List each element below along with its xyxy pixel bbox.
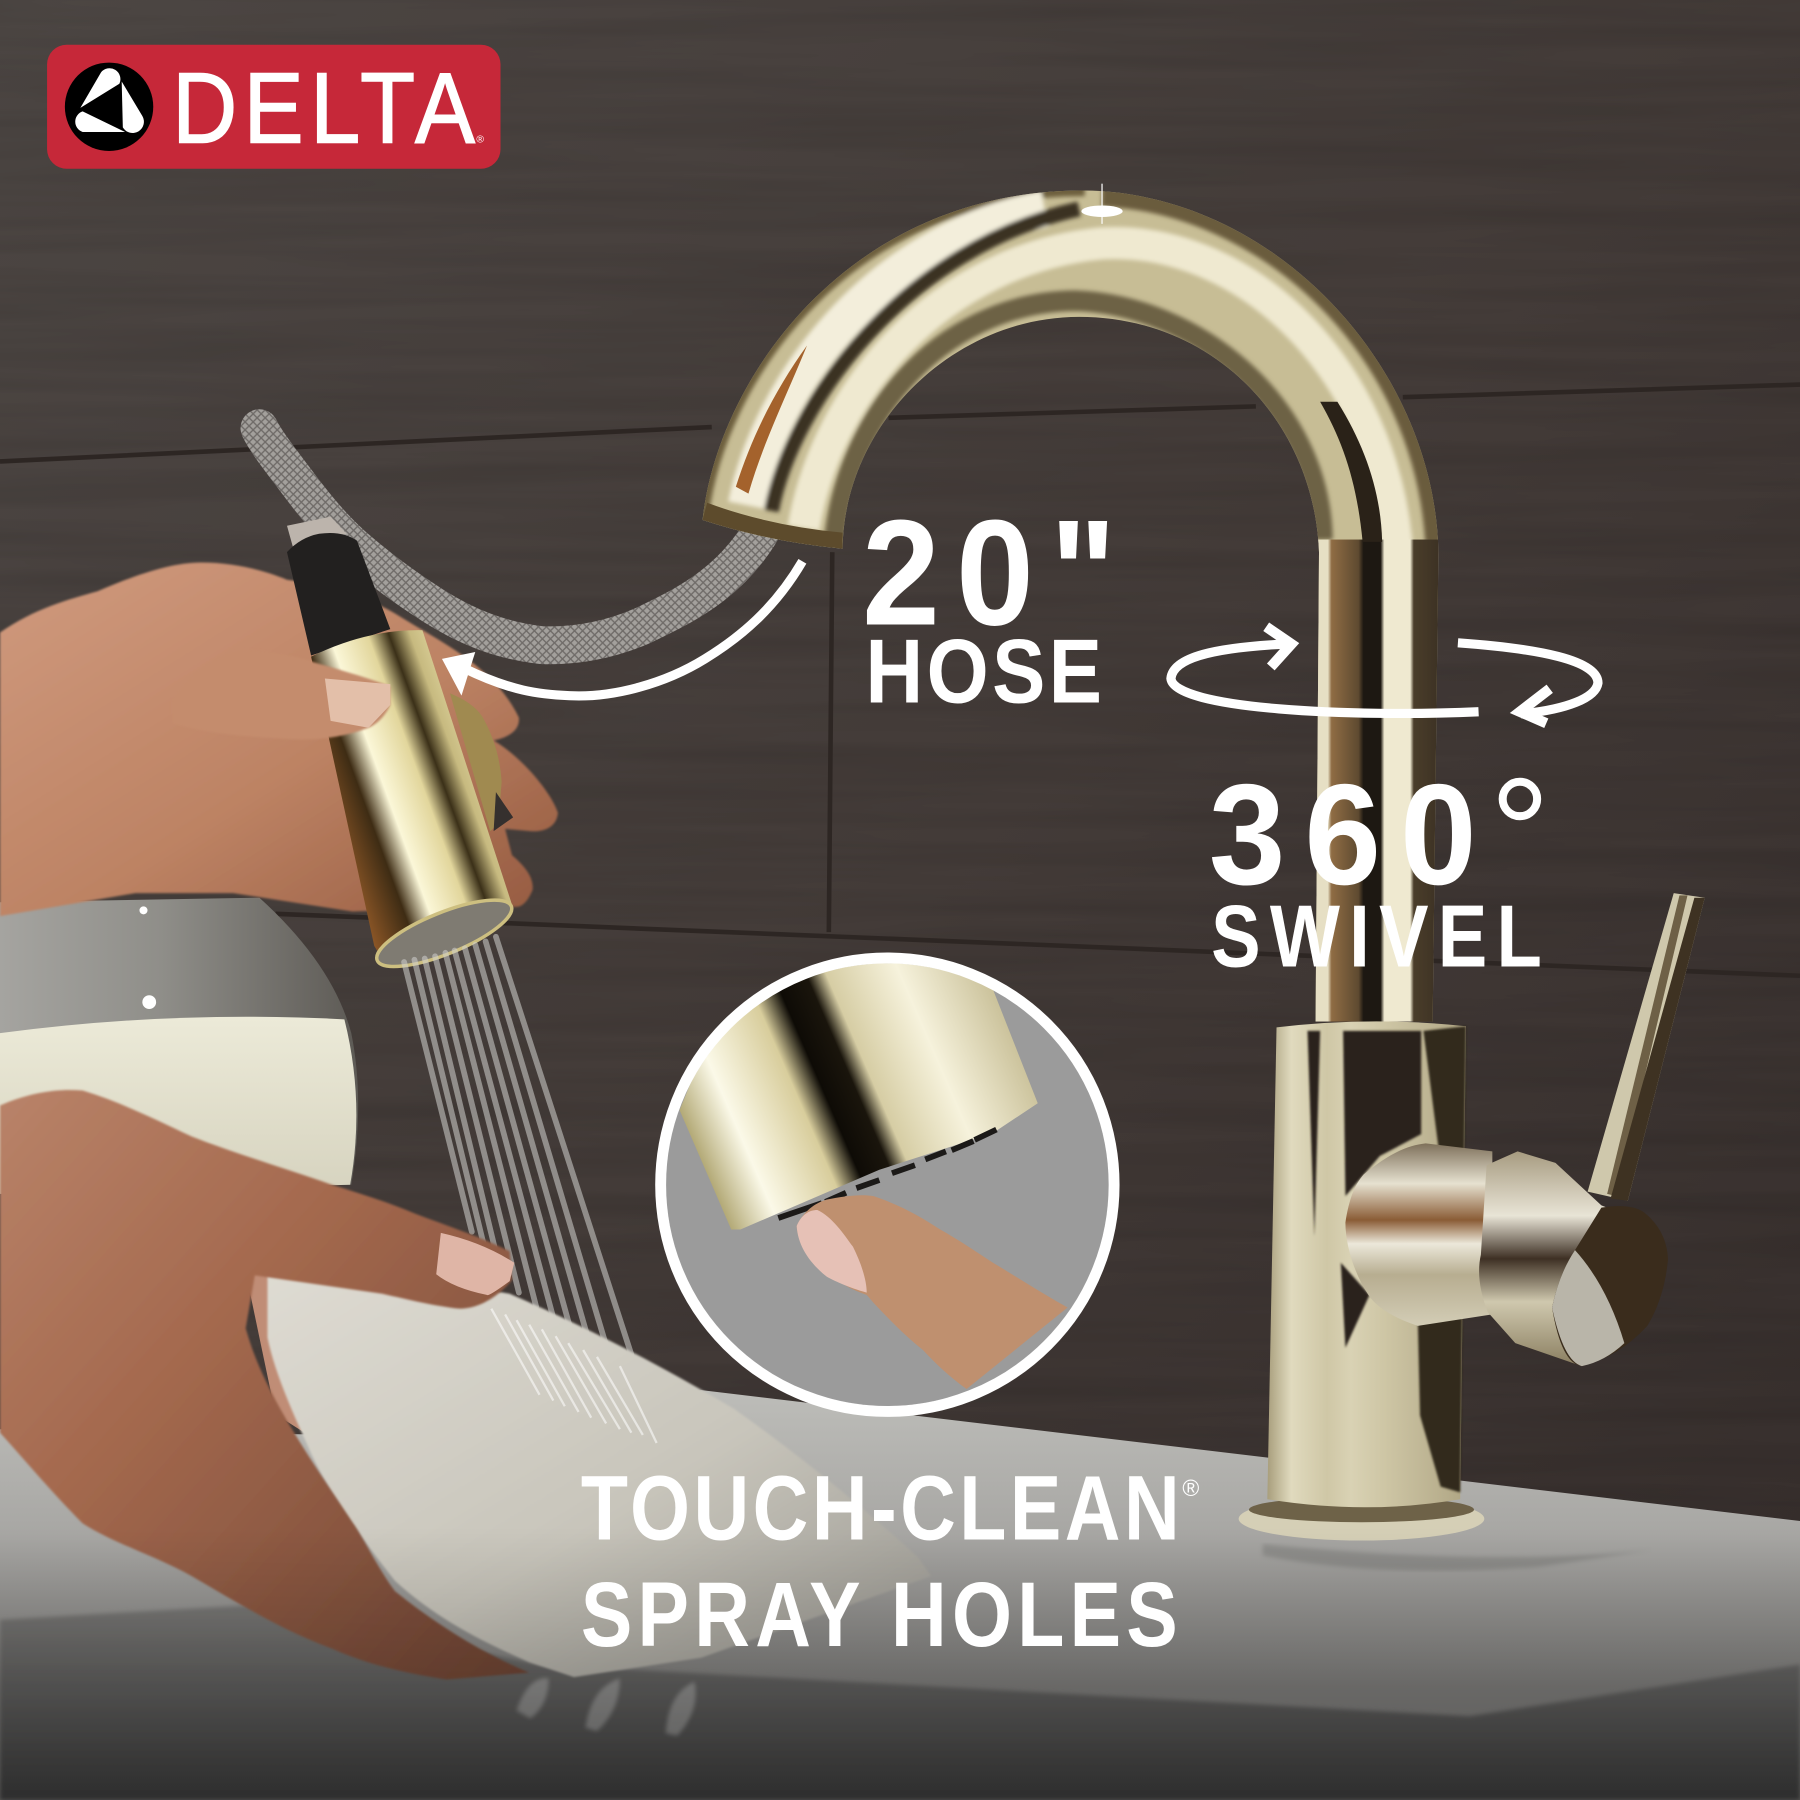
hose arrow	[442, 561, 802, 696]
touch-clean callout text: SPRAY HOLES	[581, 1563, 1178, 1666]
thumb over head	[172, 650, 390, 739]
hose callout text: HOSE	[866, 622, 1102, 723]
bowl skin reflection	[246, 1272, 335, 1452]
touch-clean callout text: TOUCH-CLEAN	[581, 1456, 1180, 1559]
faucet flange	[1239, 1497, 1484, 1541]
water spray	[404, 937, 631, 1355]
inset spray head	[680, 963, 1038, 1230]
white bowl	[267, 1275, 931, 1736]
Delta logo: DELTA	[172, 53, 476, 164]
hose callout text: 20"	[862, 489, 1116, 657]
fingernail: lower thumb	[436, 1233, 514, 1295]
handle cap	[1479, 1151, 1630, 1366]
swivel callout text: 360	[1209, 754, 1477, 915]
swivel callout text: SWIVEL	[1211, 888, 1542, 986]
fingernail: thumb	[325, 678, 390, 728]
Delta logo: ®	[476, 134, 484, 145]
nozzle	[369, 887, 519, 980]
faucet	[689, 172, 1705, 1541]
swivel callout text	[1209, 754, 1542, 986]
marble counter	[0, 1390, 1800, 1800]
lever	[1588, 893, 1705, 1201]
faucet base	[1267, 1021, 1466, 1507]
inset finger	[797, 1195, 1068, 1389]
touch-clean callout text: ®	[1182, 1475, 1199, 1501]
upper hand holding spray head	[0, 562, 558, 916]
inset spray holes	[778, 1130, 996, 1218]
lower hand holding bowl	[0, 1090, 529, 1679]
black collar	[287, 533, 390, 655]
drips	[517, 1678, 696, 1736]
water on bowl	[491, 1309, 657, 1443]
faucet spout	[689, 172, 1458, 1033]
sink basin	[0, 1605, 1800, 1800]
inset fingernail	[797, 1210, 867, 1293]
inset circle: touch-clean spray holes	[661, 918, 1114, 1411]
Delta logo	[47, 45, 501, 169]
hose ferrule	[287, 517, 347, 546]
spray head	[172, 517, 519, 980]
bottom shade	[0, 1527, 1800, 1800]
trigger	[450, 693, 502, 831]
braided hose	[259, 428, 769, 645]
handle disc	[1552, 1206, 1668, 1366]
arrowhead	[442, 652, 475, 696]
touch-clean callout text	[581, 1456, 1199, 1666]
logo mark	[65, 63, 153, 151]
head body	[311, 630, 512, 963]
spout sparkle	[1081, 184, 1123, 224]
riser	[1316, 540, 1438, 1024]
glass jar of milk	[0, 898, 358, 1194]
handle body	[1345, 1143, 1492, 1326]
swivel arrows	[1171, 627, 1598, 723]
